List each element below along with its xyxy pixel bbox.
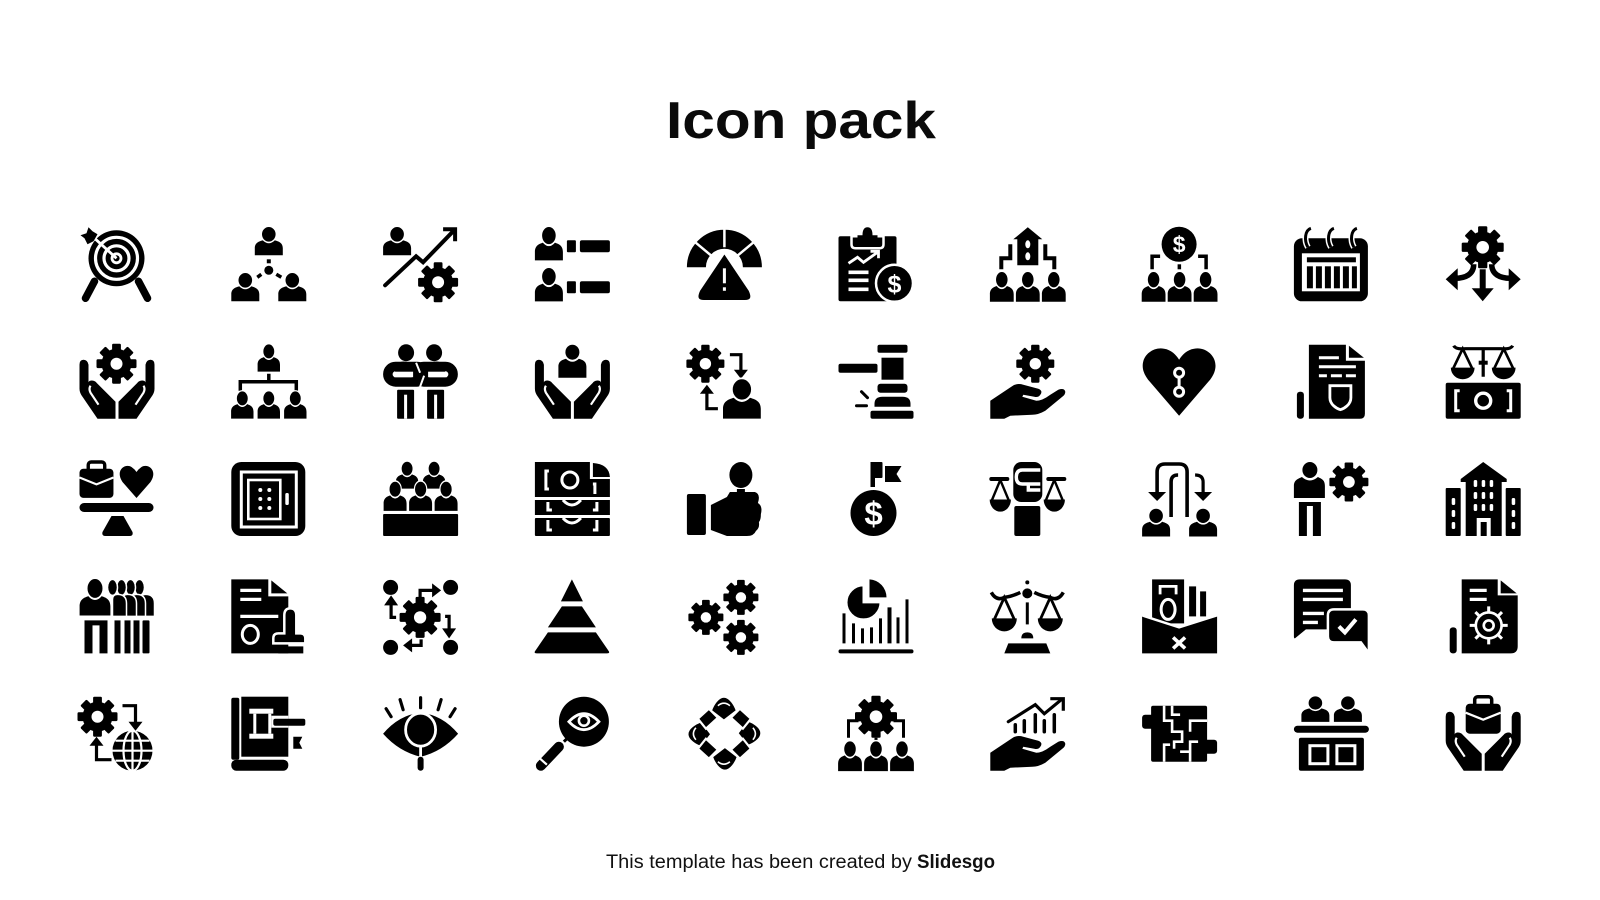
- icon: lifebuoy: [687, 697, 761, 771]
- icon: gear and person exchange: [686, 345, 761, 419]
- icon: people list: [535, 226, 610, 301]
- footer credit: This template has been created by: [606, 852, 913, 873]
- icon: financial report clipboard: $: [888, 270, 902, 298]
- icon: document with gear: [1450, 579, 1518, 653]
- icon: pyramid: [535, 579, 609, 653]
- icon: money bag goal flag: $: [864, 495, 883, 532]
- icon: money bag goal flag: [850, 462, 902, 536]
- icon: gear with branching arrows: [1446, 226, 1521, 301]
- icon: hands holding gear: [80, 344, 154, 419]
- icon: gear with team: [838, 696, 914, 771]
- icon: hand holding gear: [990, 345, 1065, 419]
- icon: organisation chart: [231, 344, 306, 419]
- icon: meeting desk: [1294, 696, 1369, 771]
- icon: archery target: [80, 227, 148, 298]
- icon: person with gear: [1294, 462, 1368, 536]
- footer credit: Slidesgo: [917, 852, 995, 873]
- icon: balance scale: [991, 580, 1063, 653]
- icon: hands holding briefcase: [1446, 697, 1521, 771]
- icon: magnifier with eye: [538, 697, 609, 766]
- icon: crowd behind box: [383, 461, 458, 536]
- icon: fist with coin: [687, 462, 761, 536]
- icon: risk gauge: [693, 227, 756, 301]
- icon: two people linked arms: [388, 344, 453, 419]
- icon grid: [78, 226, 1521, 771]
- icon: money envelope rejected: [1142, 579, 1217, 653]
- icon: stacked money documents: [535, 462, 610, 536]
- icon: building with team: [990, 227, 1066, 302]
- icon: growth arrow with person and gear: [383, 226, 458, 302]
- icon: gavel: [838, 345, 914, 419]
- icon: financial report clipboard: [838, 227, 913, 302]
- icon: three gears: [688, 580, 758, 655]
- icon: office building: [1446, 462, 1521, 536]
- icon: document with stamp: [231, 579, 305, 653]
- icon: work life balance: [80, 462, 154, 536]
- icon: fist with scales: [990, 462, 1065, 536]
- icon: insurance document with shield: [1297, 345, 1365, 419]
- icon: heart with link: [1143, 348, 1216, 416]
- icon: calendar: [1294, 228, 1368, 301]
- title: Icon pack: [666, 92, 936, 150]
- icon: money to team: [1142, 227, 1218, 302]
- icon: chat bubbles with check: [1294, 579, 1369, 653]
- icon: scale over money: [1446, 346, 1521, 419]
- icon: safe: [231, 462, 305, 536]
- icon: hands holding person: [535, 345, 610, 419]
- icon: hand with rising chart: [990, 699, 1065, 771]
- icon: team triangle: [231, 226, 306, 301]
- icon: gear and globe exchange: [78, 697, 152, 771]
- icon: crowd of workers: [80, 578, 154, 653]
- icon: gear process cycle: [383, 580, 458, 655]
- icon: money to team: $: [1173, 231, 1186, 257]
- icon: puzzle maze: [1142, 706, 1217, 762]
- icon: pie and bar chart: [838, 579, 914, 653]
- icon: eye with magnifier: [383, 698, 458, 771]
- icon: law book with gavel: [231, 697, 305, 771]
- icon: people exchange arrows: [1142, 464, 1217, 536]
